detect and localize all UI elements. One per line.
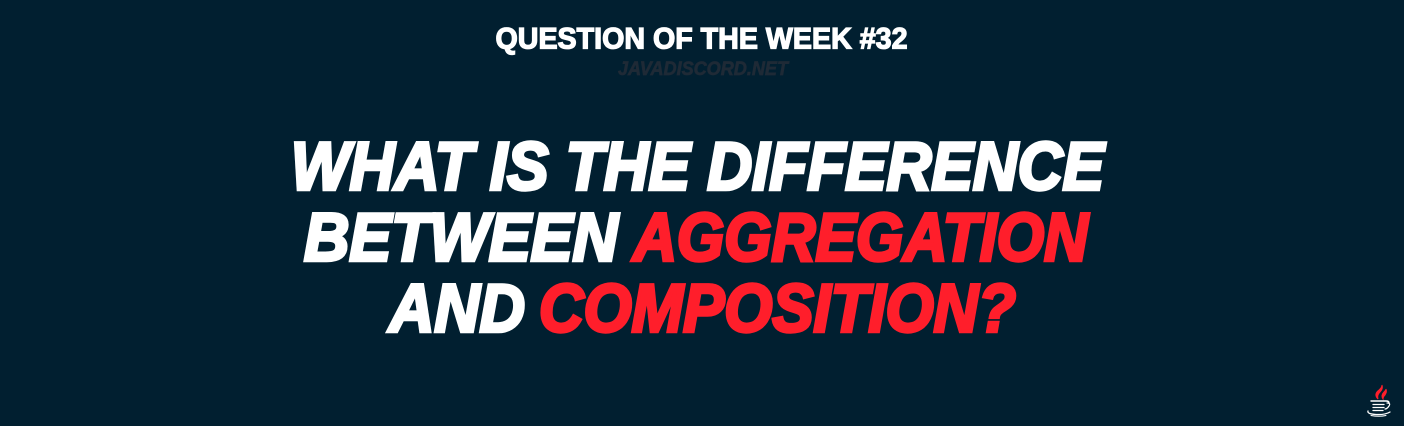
icon: java coffee cup: [1368, 385, 1390, 416]
main question: [291, 129, 1106, 346]
line 3: AND: [387, 271, 525, 346]
subheading: website: JAVADISCORD.NET: [618, 59, 789, 80]
line 2: AGGREGATION: [631, 200, 1089, 275]
line 2: [304, 200, 1089, 275]
line 1: WHAT IS THE DIFFERENCE: [291, 129, 1106, 204]
line 2: BETWEEN: [304, 200, 619, 275]
heading: question of the week: QUESTION OF THE WEEK #32: [496, 22, 908, 56]
line 3: COMPOSITION?: [539, 271, 1016, 346]
